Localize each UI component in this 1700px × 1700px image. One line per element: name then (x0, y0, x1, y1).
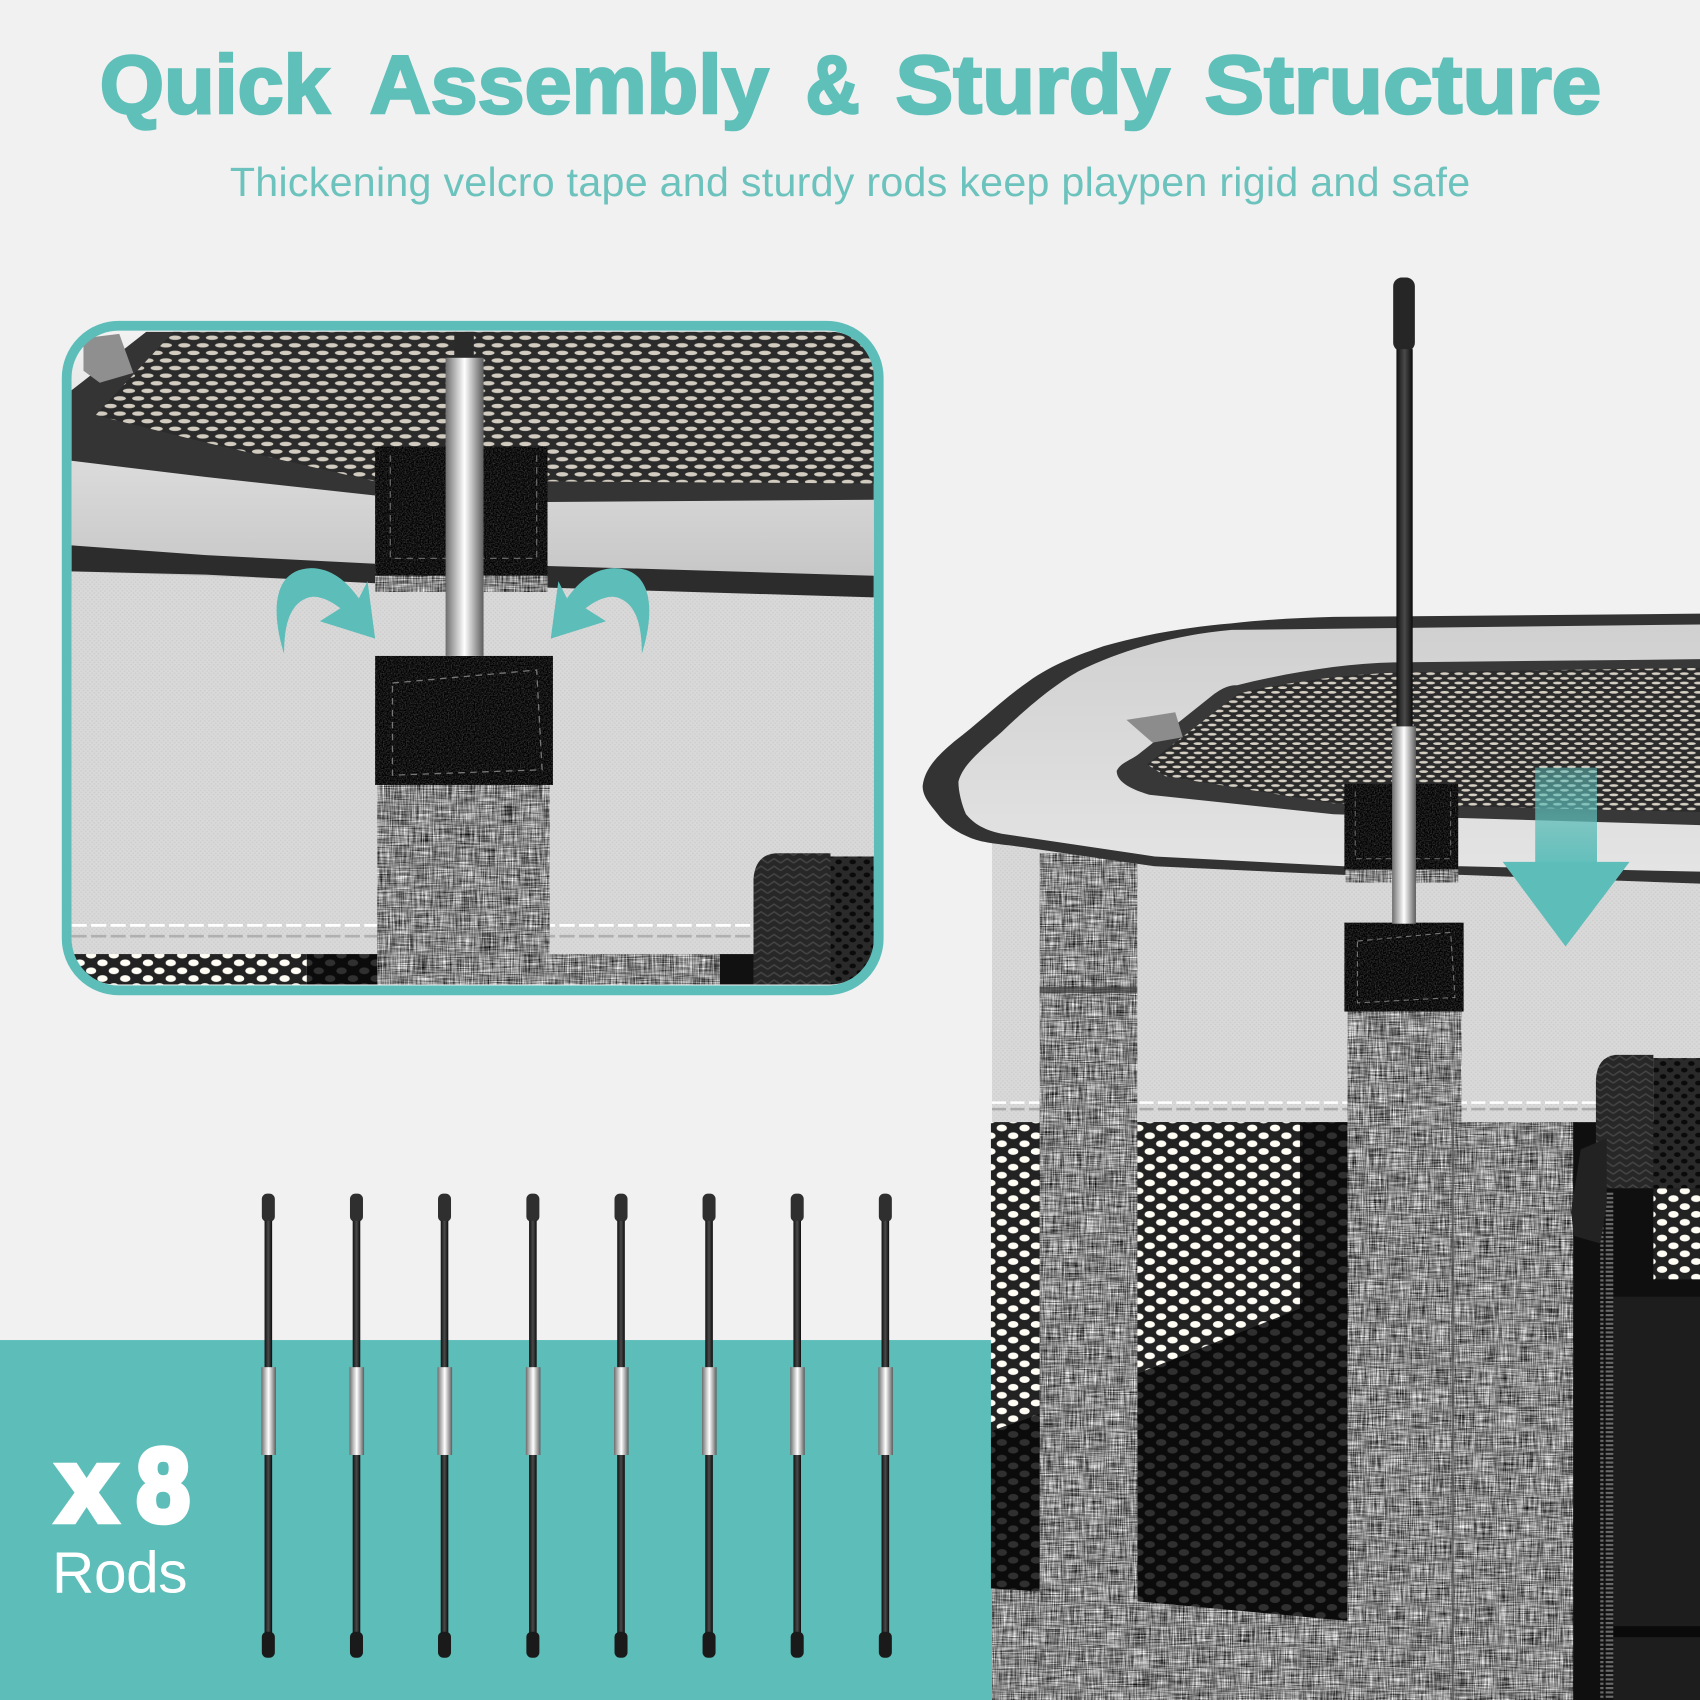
title: & (806, 39, 860, 131)
panel: velcro close-up inset (67, 326, 879, 990)
rod 2 (349, 1194, 364, 1658)
lid zipper surround (1117, 659, 1700, 825)
bottom linen strip (550, 954, 720, 984)
zipper band (72, 332, 874, 502)
title: Assembly (370, 39, 769, 131)
x8 count: x (57, 1428, 116, 1544)
left linen strap (1040, 853, 1137, 1700)
arrow: curved left (277, 568, 375, 654)
center mesh window (1137, 1122, 1348, 1621)
subtitle: Thickening velcro tape and sturdy rods keep playpen rigid and safe (230, 159, 1470, 205)
lid light surface (958, 624, 1700, 872)
rod 3 (437, 1194, 452, 1658)
arrow: press down (1503, 768, 1630, 946)
rod 8 (878, 1194, 893, 1658)
x8 count: 8 (137, 1428, 190, 1544)
upright rod with silver sleeve (1392, 278, 1416, 924)
rod close-up (446, 332, 484, 656)
upper velcro tab (375, 447, 548, 592)
title: Sturdy (896, 39, 1170, 131)
linen lower wall (992, 1122, 1577, 1700)
lid rim (923, 614, 1700, 884)
handle close-up (754, 853, 874, 984)
right center linen strap (1348, 1010, 1461, 1700)
top mesh (95, 332, 874, 484)
stitched seam (72, 925, 754, 936)
lower velcro tab (375, 656, 553, 785)
right lower velcro tab (1344, 923, 1464, 1012)
rods label: Rods (52, 1541, 188, 1606)
rod 7 (790, 1194, 805, 1658)
rods row (261, 1194, 893, 1658)
rod 4 (526, 1194, 540, 1658)
icon: zipper pull (1126, 712, 1183, 743)
lid rim trim (72, 545, 874, 597)
side fabric (72, 571, 874, 984)
right black door (1573, 1122, 1700, 1700)
bottom black gap (720, 954, 754, 984)
title: Quick (100, 39, 330, 131)
rod 6 (702, 1194, 717, 1658)
teal inset frame (67, 326, 879, 990)
product photo: playpen corner (923, 278, 1700, 1700)
left mesh window (991, 1122, 1040, 1592)
title: Structure (1205, 39, 1601, 131)
bottom mesh (72, 954, 378, 984)
playpen side fabric (992, 840, 1700, 1122)
lid band (72, 383, 874, 582)
rod 5 (614, 1194, 629, 1658)
door handle (1571, 1055, 1700, 1244)
linen strap (377, 784, 550, 984)
icon: zipper pull close-up (83, 334, 133, 383)
arrow: curved right (551, 568, 649, 654)
rod 1 (261, 1194, 276, 1658)
stitched seam (992, 1103, 1700, 1109)
inset photo (72, 332, 874, 984)
panel: rods count background (0, 1340, 992, 1700)
right top velcro tab (1344, 784, 1458, 883)
lid mesh panel (1147, 668, 1700, 812)
